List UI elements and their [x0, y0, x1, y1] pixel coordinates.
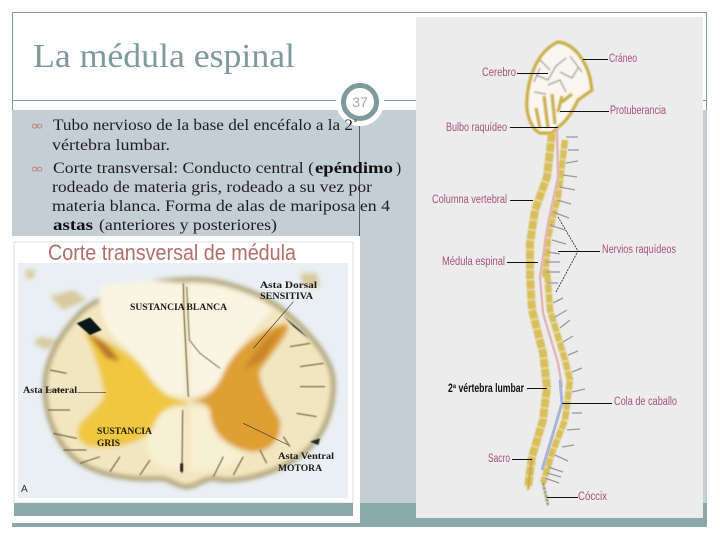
anatomical labels	[432, 53, 677, 503]
bullet two text	[52, 160, 401, 234]
figure heading: Corte transversal de médula	[48, 240, 297, 265]
micrograph labels: SENSITIVA	[260, 291, 314, 301]
bullet two text: (anteriores y posteriores)	[99, 217, 277, 234]
bullet one text	[52, 117, 357, 154]
anatomical labels: Cola de caballo	[614, 396, 677, 408]
vertebrae	[528, 133, 570, 505]
bullet two text: Corte transversal: Conducto central (	[53, 160, 314, 177]
bullet one text: Tubo nervioso de la base del encéfalo a la 2	[53, 117, 353, 134]
spinal cord micrograph	[18, 263, 348, 498]
micrograph labels: Asta Ventral	[278, 451, 335, 461]
spinal nerves	[545, 137, 585, 483]
bullet two text: materia blanca. Forma de alas de mariposa en 4	[52, 198, 390, 215]
bullet two text: epéndimo	[315, 160, 393, 177]
micrograph labels: SUSTANCIA	[97, 426, 153, 436]
slide number badge: 37	[352, 94, 368, 110]
bullet two text: rodeado de materia gris, rodeado a su vez por	[52, 179, 373, 196]
bullet one: ∞	[30, 119, 44, 134]
micrograph labels: A	[21, 484, 28, 495]
spinal column diagram	[416, 17, 703, 518]
title: La médula espinal	[33, 38, 295, 75]
leader lines	[77, 302, 293, 445]
anatomical labels: Cerebro	[482, 67, 516, 79]
anatomical labels: Sacro	[488, 453, 510, 465]
tissue shapes	[25, 270, 333, 487]
anatomical labels: Columna vertebral	[432, 194, 507, 206]
anatomical labels: Protuberancia	[610, 105, 666, 117]
dark stains	[77, 316, 320, 445]
anatomical labels: 2ª vértebra lumbar	[448, 383, 524, 395]
nerve bracket	[556, 217, 578, 292]
micrograph labels: MOTORA	[278, 463, 323, 473]
micrograph labels: Asta Lateral	[23, 385, 78, 395]
bullet one text: ª	[354, 118, 357, 129]
anatomical labels: Bulbo raquídeo	[446, 122, 507, 134]
fissures and striations	[47, 283, 325, 477]
skull and brain	[527, 42, 592, 133]
bullet two: ∞	[30, 162, 44, 177]
anatomical labels: Cráneo	[609, 53, 637, 65]
anatomical labels: Nervios raquídeos	[602, 244, 676, 256]
bullet two text: )	[396, 160, 401, 177]
anatomical labels: Médula espinal	[442, 256, 505, 268]
spinal cord	[540, 127, 562, 470]
bullet one text: vértebra lumbar.	[52, 137, 170, 154]
bullet two text: astas	[53, 217, 93, 234]
body text	[30, 117, 401, 234]
micrograph labels: SUSTANCIA BLANCA	[130, 302, 228, 312]
slide number badge	[336, 78, 384, 126]
micrograph labels: GRIS	[97, 438, 120, 448]
leader lines	[507, 60, 612, 498]
anatomical labels: Cóccix	[578, 491, 607, 503]
micrograph labels: Asta Dorsal	[260, 280, 318, 290]
cross-section figure	[12, 236, 360, 523]
micrograph labels	[21, 280, 335, 495]
